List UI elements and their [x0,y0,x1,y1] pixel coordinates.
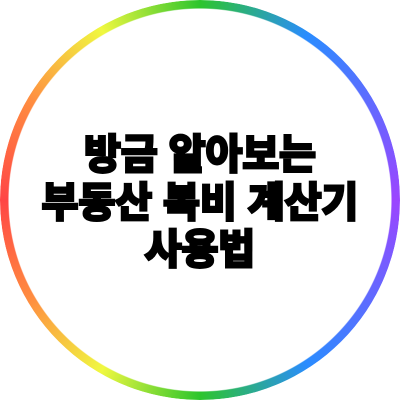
title [42,132,358,273]
title line 3: 사용법 [145,227,255,273]
title line 1: 방금 알아보는 [84,132,316,178]
title line 2: 부동산 복비 계산기 [42,180,358,226]
